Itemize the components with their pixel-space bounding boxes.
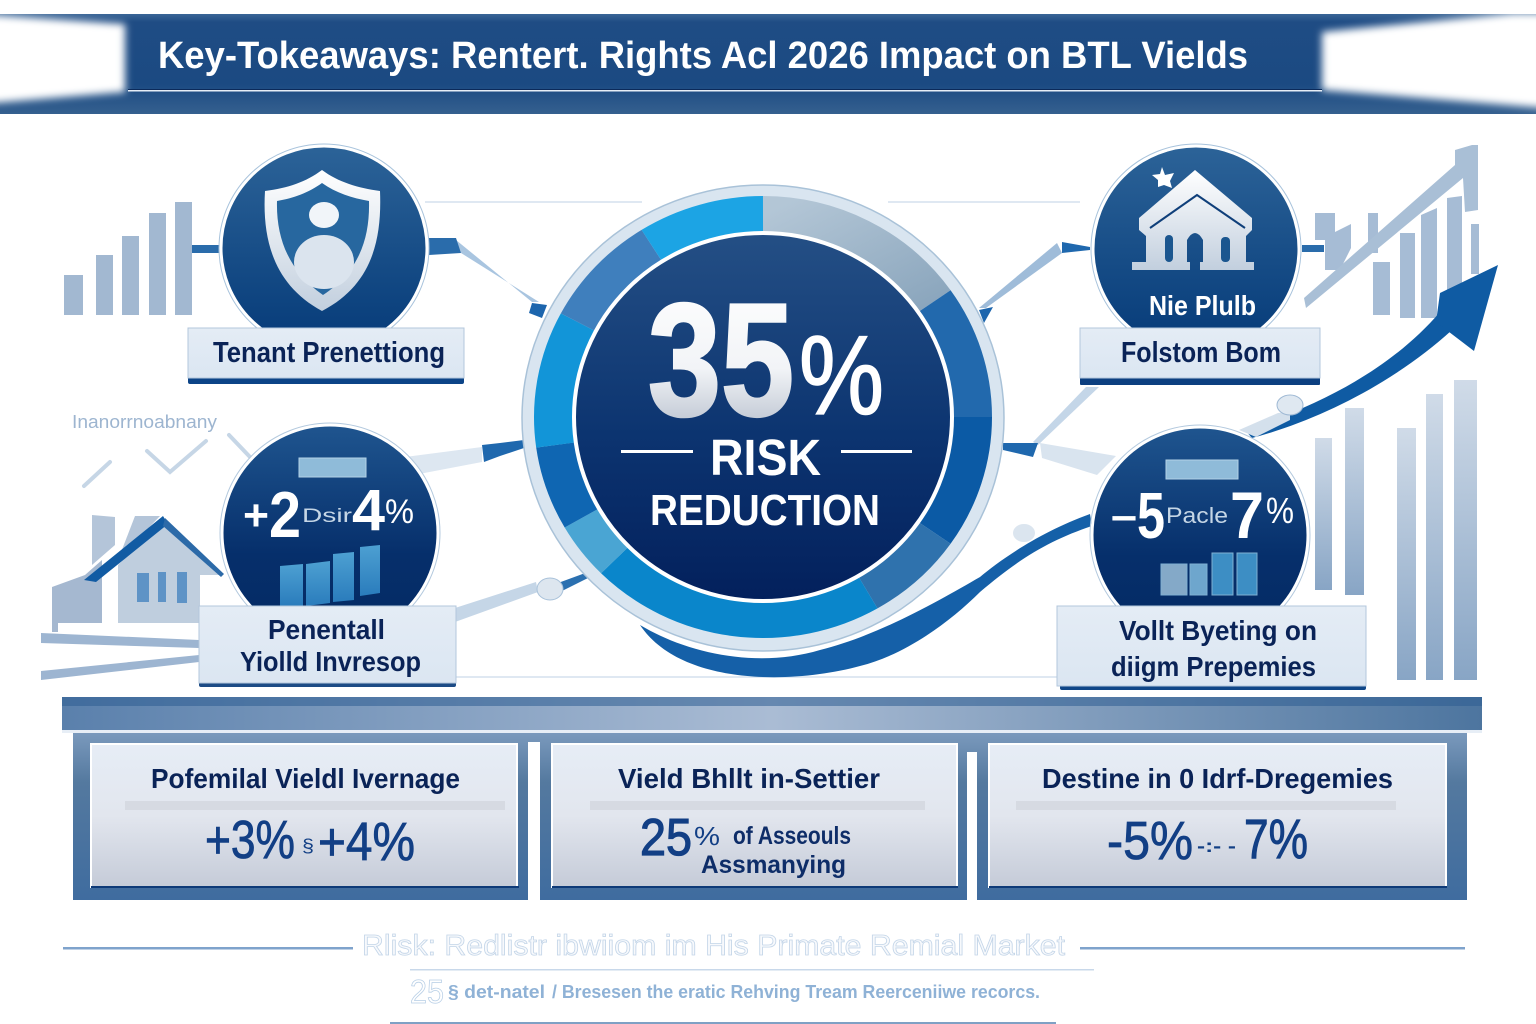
- panel: destine: [989, 744, 1447, 888]
- faded caption: Inanorrnoabnany: [72, 412, 217, 432]
- circle caption: Nie Plulb: [1149, 290, 1256, 321]
- label: potential yield: [199, 606, 456, 687]
- panel: yield built-in setter: [552, 744, 958, 888]
- yield figures: [243, 478, 414, 551]
- panel value: of Asseouls: [733, 822, 851, 850]
- decorative bar chart: bottom right: [1315, 380, 1477, 680]
- header banner: [0, 13, 1536, 114]
- yield decline circle: [1090, 425, 1310, 645]
- label: tenant: [188, 328, 464, 384]
- icon: house with star: [1132, 167, 1254, 270]
- gauge ring segments: [554, 215, 972, 619]
- yield figures: %: [385, 493, 414, 531]
- panel heading: Pofemilal Vieldl Ivernage: [151, 763, 460, 794]
- label: folstom: [1080, 328, 1320, 385]
- connector: top-right circle to centre: [979, 242, 1324, 323]
- big figure: 35: [648, 270, 794, 449]
- icon: shield with person: [265, 170, 380, 311]
- footer heading with rules: Rlisk: Redlistr ibwiiom im His Primate Remial Market: [362, 930, 1065, 962]
- label: volt byeting: [1057, 606, 1366, 690]
- label: volt byeting: Vollt Byeting on: [1119, 615, 1317, 646]
- panel value: -:- -: [1197, 836, 1236, 856]
- swoosh curve under centre circle: [640, 514, 1092, 677]
- decline figures: –: [1111, 491, 1137, 540]
- panel value: [640, 809, 851, 879]
- panel value: +3%: [205, 810, 295, 870]
- panel value: [1107, 807, 1308, 871]
- label: potential yield: Yiolld Invresop: [240, 646, 421, 677]
- panel: potential yield average: [91, 744, 519, 888]
- title: Key-Tokeaways: Rentert. Rights Acl 2026 Impact on BTL Vields: [158, 35, 1248, 77]
- label: potential yield: Penentall: [268, 614, 385, 645]
- footer note with rules: § det-natel: [448, 982, 545, 1002]
- panel value: [205, 810, 415, 872]
- yield figures: 2: [269, 478, 301, 551]
- panel heading: Vield Bhllt in-Settier: [618, 763, 880, 794]
- mini bar chart: [280, 545, 380, 606]
- panel value: %: [694, 821, 720, 851]
- risk label: RISK: [710, 429, 821, 486]
- footer note with rules: [390, 969, 1094, 1024]
- label: volt byeting: diigm Prepemies: [1111, 651, 1316, 682]
- property circle with house icon: [1091, 144, 1301, 354]
- decline figures: 5: [1137, 479, 1165, 552]
- footer note with rules: 25: [410, 973, 444, 1010]
- thin guide lines: [425, 201, 1080, 678]
- label: folstom: Folstom Bom: [1121, 337, 1281, 369]
- connectors: left lower circle to centre: [405, 440, 588, 622]
- panel value: 7%: [1244, 807, 1308, 870]
- decline figures: Pacle: [1166, 503, 1228, 528]
- connector: top-left circle to centre: [192, 238, 547, 318]
- panel value: -5%: [1107, 811, 1193, 871]
- yield increase circle: [220, 423, 440, 643]
- panel value: 25: [640, 809, 692, 867]
- mini bar chart: [1161, 553, 1257, 595]
- decorative chart with rising arrow: top right: [1304, 145, 1479, 318]
- percent sign: %: [799, 313, 884, 438]
- tenant circle with shield icon: [219, 144, 429, 352]
- decline figures: [1111, 478, 1294, 552]
- panel value: §: [302, 836, 314, 856]
- reduction label: REDUCTION: [650, 486, 880, 535]
- panel value: +4%: [318, 812, 415, 872]
- footer note with rules: / Bresesen the eratic Rehving Tream Reerceniiwe recorcs.: [552, 982, 1040, 1002]
- shelf and panel base: [62, 697, 1482, 902]
- yield figures: +: [243, 491, 269, 540]
- decorative bar chart: top left: [64, 202, 192, 315]
- decorative house scene: bottom left: [41, 412, 250, 680]
- rising blue arrow: [1245, 265, 1498, 438]
- panel heading: Destine in 0 Idrf-Dregemies: [1042, 763, 1393, 794]
- label: tenant: Tenant Prenettiong: [213, 337, 445, 369]
- yield figures: 4: [352, 478, 385, 543]
- connector: right circles to centre: [1003, 387, 1303, 475]
- decline figures: %: [1266, 490, 1294, 531]
- decline figures: 7: [1230, 478, 1264, 552]
- yield figures: Dsir: [302, 506, 353, 527]
- panel value: Assmanying: [701, 851, 846, 879]
- central risk gauge: [522, 185, 1004, 651]
